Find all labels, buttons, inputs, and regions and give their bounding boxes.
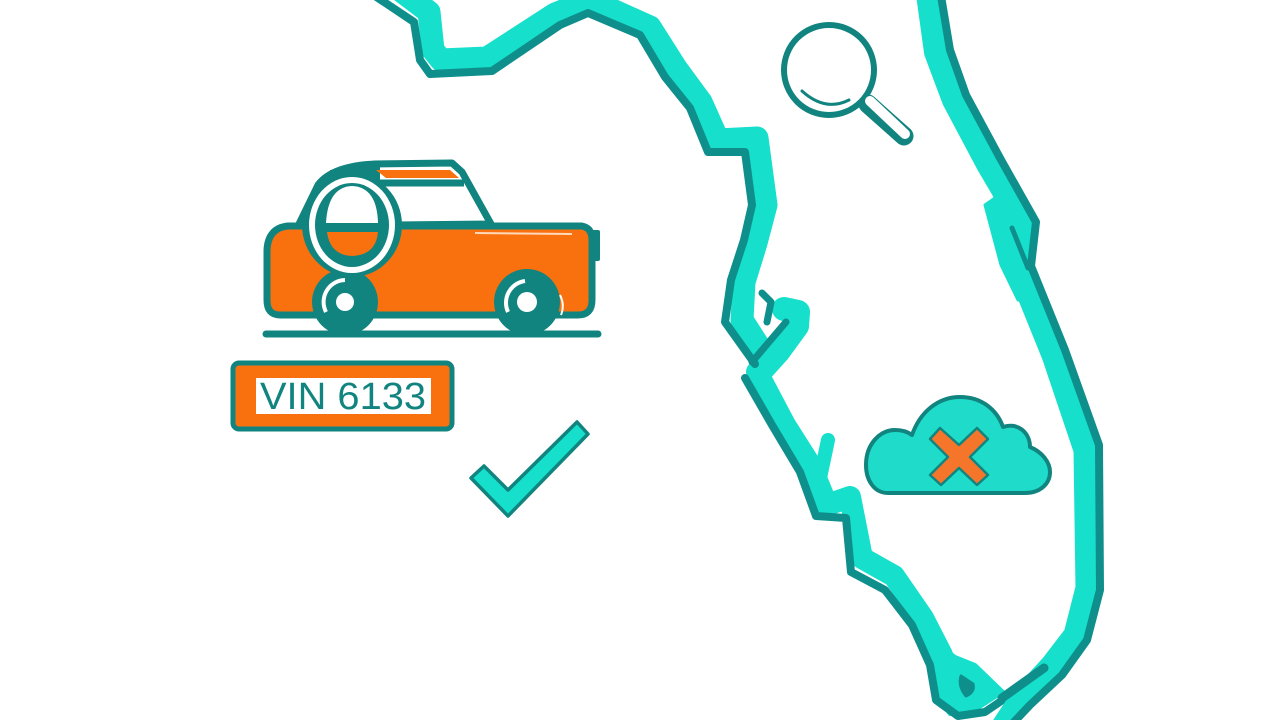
icon: cloud with cross: [866, 397, 1050, 493]
truck body: [267, 226, 592, 315]
body highlight: [475, 233, 572, 234]
cab roof stripe: [376, 170, 459, 178]
map: Florida outline: [375, 0, 1100, 720]
VIN plate: [233, 363, 452, 429]
truck cab: [298, 163, 491, 226]
cab roof band: [330, 165, 380, 190]
front wheel: [312, 269, 378, 335]
icon: check mark: [471, 422, 588, 516]
west coast outline: [375, 0, 1010, 716]
rear wheel: [494, 269, 563, 335]
VIN text: VIN 6133: [260, 376, 426, 418]
icon: magnifying glass: [784, 25, 905, 136]
cross: [930, 428, 988, 485]
tail light: [592, 230, 600, 261]
icon: orange truck with lens: [266, 163, 600, 335]
east coast outline: [928, 0, 1100, 720]
ground line: [266, 330, 598, 338]
southern tip fill: [933, 640, 1003, 714]
lens over truck: [302, 173, 402, 277]
